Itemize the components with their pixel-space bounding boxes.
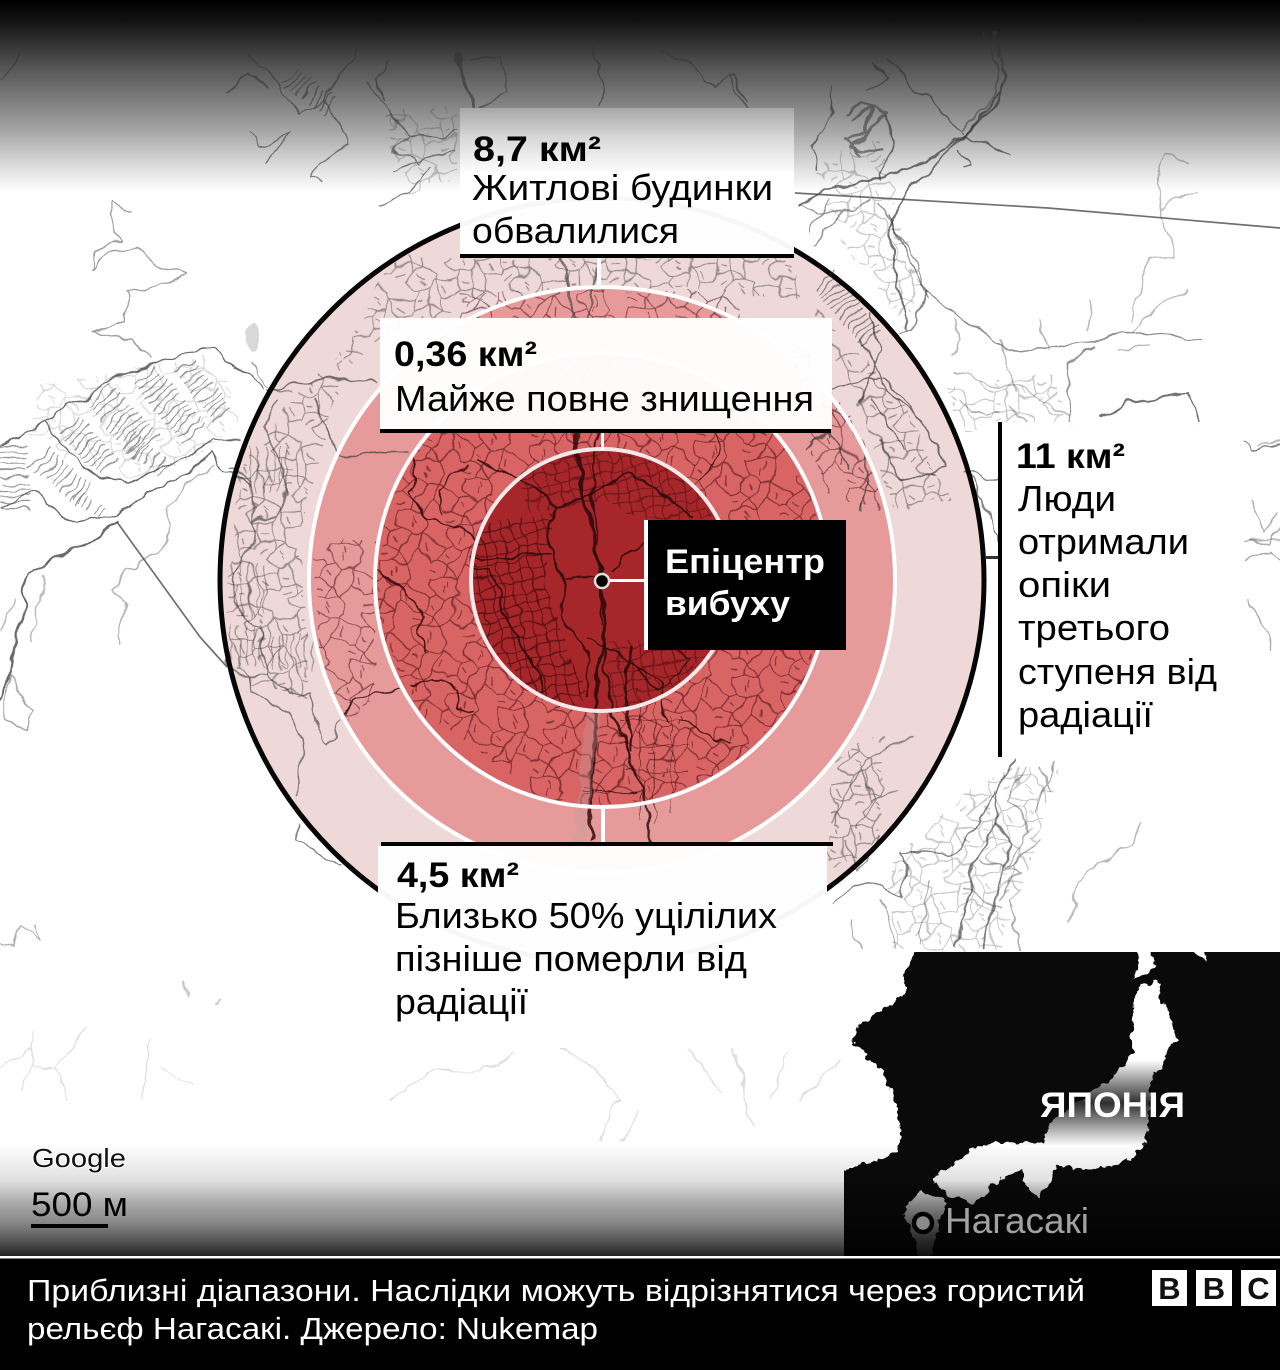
pointer ticks — [597, 258, 605, 842]
footnote: Приблизні діапазони. Наслідки можуть відрізнятися через гористий — [27, 1273, 1085, 1308]
footer white rule — [0, 1256, 1280, 1258]
connector from outer ring to 11 km2 label — [985, 556, 999, 559]
description — [395, 895, 777, 1022]
inset locator map: Japan — [830, 947, 1280, 1263]
top dark gradient — [0, 0, 1280, 192]
major roads through the centre — [343, 430, 730, 843]
description: Люди — [1018, 478, 1116, 519]
description: третього — [1018, 607, 1170, 648]
footer — [0, 1256, 1280, 1370]
tick to 8,7 label — [597, 258, 601, 286]
ring: 11 km2 burns — [220, 198, 984, 962]
Kyushu — [902, 1190, 947, 1256]
street texture in outer ring — [225, 258, 950, 870]
country label: ЯПОНІЯ — [1040, 1086, 1185, 1125]
white ring 3 — [375, 353, 829, 807]
blast radius rings — [220, 198, 984, 962]
footnote: рельєф Нагасакі. Джерело: Nukemap — [27, 1311, 598, 1346]
tick to 0,36 label — [601, 433, 604, 450]
description: пізніше померли від — [395, 938, 747, 979]
description — [1018, 478, 1217, 735]
epicentre text — [665, 543, 825, 623]
ring outlines — [220, 198, 984, 962]
grid streets inside the inner circle — [474, 452, 714, 708]
epicentre text: Епіцентр — [665, 543, 825, 581]
pond — [247, 322, 259, 352]
BBC logo: B — [1158, 1271, 1181, 1306]
white ring 2 — [309, 287, 895, 873]
Honshu — [933, 978, 1175, 1203]
river band — [572, 712, 600, 845]
label: 0,36 km2 — [380, 318, 832, 433]
mainland coast — [844, 952, 914, 1171]
description: отримали — [1018, 521, 1189, 562]
roads outside the rings: top left — [0, 40, 745, 207]
label: 11 km2 — [998, 422, 1242, 757]
label panel — [380, 318, 832, 429]
label rule — [381, 842, 833, 846]
inset background — [844, 952, 1280, 1256]
street texture in second ring — [312, 292, 885, 720]
inset labels — [914, 1086, 1185, 1241]
street texture: left city — [30, 355, 240, 478]
ring: 8.7 km2 houses collapsed — [309, 287, 895, 873]
roads: faint lower map — [0, 925, 840, 1140]
description: ступеня від — [1018, 651, 1217, 692]
street texture in middle ring — [377, 433, 816, 805]
label: 8,7 km2 — [460, 108, 794, 258]
epicentre dot — [595, 574, 609, 588]
epicentre label panel — [644, 520, 846, 650]
roads in the outer ring — [227, 258, 913, 870]
BBC logo: C — [1247, 1271, 1270, 1306]
label: 4,5 km2 — [378, 842, 833, 1048]
heading: 0,36 км² — [394, 335, 537, 374]
roads outside the rings: left city — [0, 202, 290, 728]
white label edge — [644, 520, 648, 650]
bottom dark gradient — [0, 1143, 1280, 1256]
white inner ring — [471, 449, 733, 711]
inner circle colour over street texture — [471, 449, 733, 711]
label rule — [380, 429, 831, 433]
shade behind Nagasaki label — [902, 1184, 1048, 1256]
Nagasaki label: Нагасакі — [945, 1200, 1089, 1241]
heading: 4,5 км² — [397, 856, 519, 895]
description: Майже повне знищення — [395, 378, 814, 419]
description: радіації — [1018, 694, 1153, 735]
scale text: 500 м — [31, 1186, 128, 1224]
heading: 11 км² — [1016, 437, 1125, 476]
shade behind Japan label — [1010, 1062, 1164, 1144]
label rule — [998, 422, 1002, 757]
scale line — [31, 1224, 108, 1228]
label panel — [378, 846, 827, 1048]
street texture: upper clusters — [385, 108, 925, 325]
line across top right — [795, 193, 1280, 228]
residential street hatching: left city — [15, 365, 225, 515]
ring: 4.5 km2 radiation — [375, 353, 829, 807]
northern islands — [1132, 952, 1207, 980]
connector line — [610, 579, 646, 582]
roads outside the rings: right and bottom right — [833, 440, 1280, 951]
street texture: lower right and right clusters — [890, 375, 1060, 950]
BBC logo — [1152, 1270, 1276, 1306]
label rule — [460, 254, 794, 258]
roads outside the rings: top right — [799, 30, 1280, 510]
footnote — [27, 1273, 1085, 1346]
description line 2: обвалилися — [472, 210, 679, 251]
tick to 4,5 label — [601, 808, 605, 842]
map credit: Google — [32, 1143, 126, 1173]
description: опіки — [1018, 564, 1111, 605]
epicentre text: вибуху — [665, 585, 790, 623]
land masses — [830, 947, 1206, 1263]
ring: 0.36 km2 near total destruction — [471, 449, 733, 711]
Nagasaki marker — [914, 1214, 932, 1232]
label panel — [1002, 422, 1242, 757]
line across left — [117, 522, 227, 667]
description: Житлові будинки — [472, 167, 773, 208]
description: Близько 50% уцілілих — [395, 895, 777, 936]
BBC logo: B — [1203, 1271, 1225, 1306]
description: радіації — [395, 981, 528, 1022]
epicentre marker — [595, 520, 846, 650]
heading: 8,7 км² — [473, 130, 601, 169]
scale bar — [31, 1186, 128, 1228]
outer black ring — [220, 198, 984, 962]
footer background — [0, 1258, 1280, 1370]
label panel — [460, 108, 794, 254]
straight transmission lines — [117, 193, 1280, 667]
